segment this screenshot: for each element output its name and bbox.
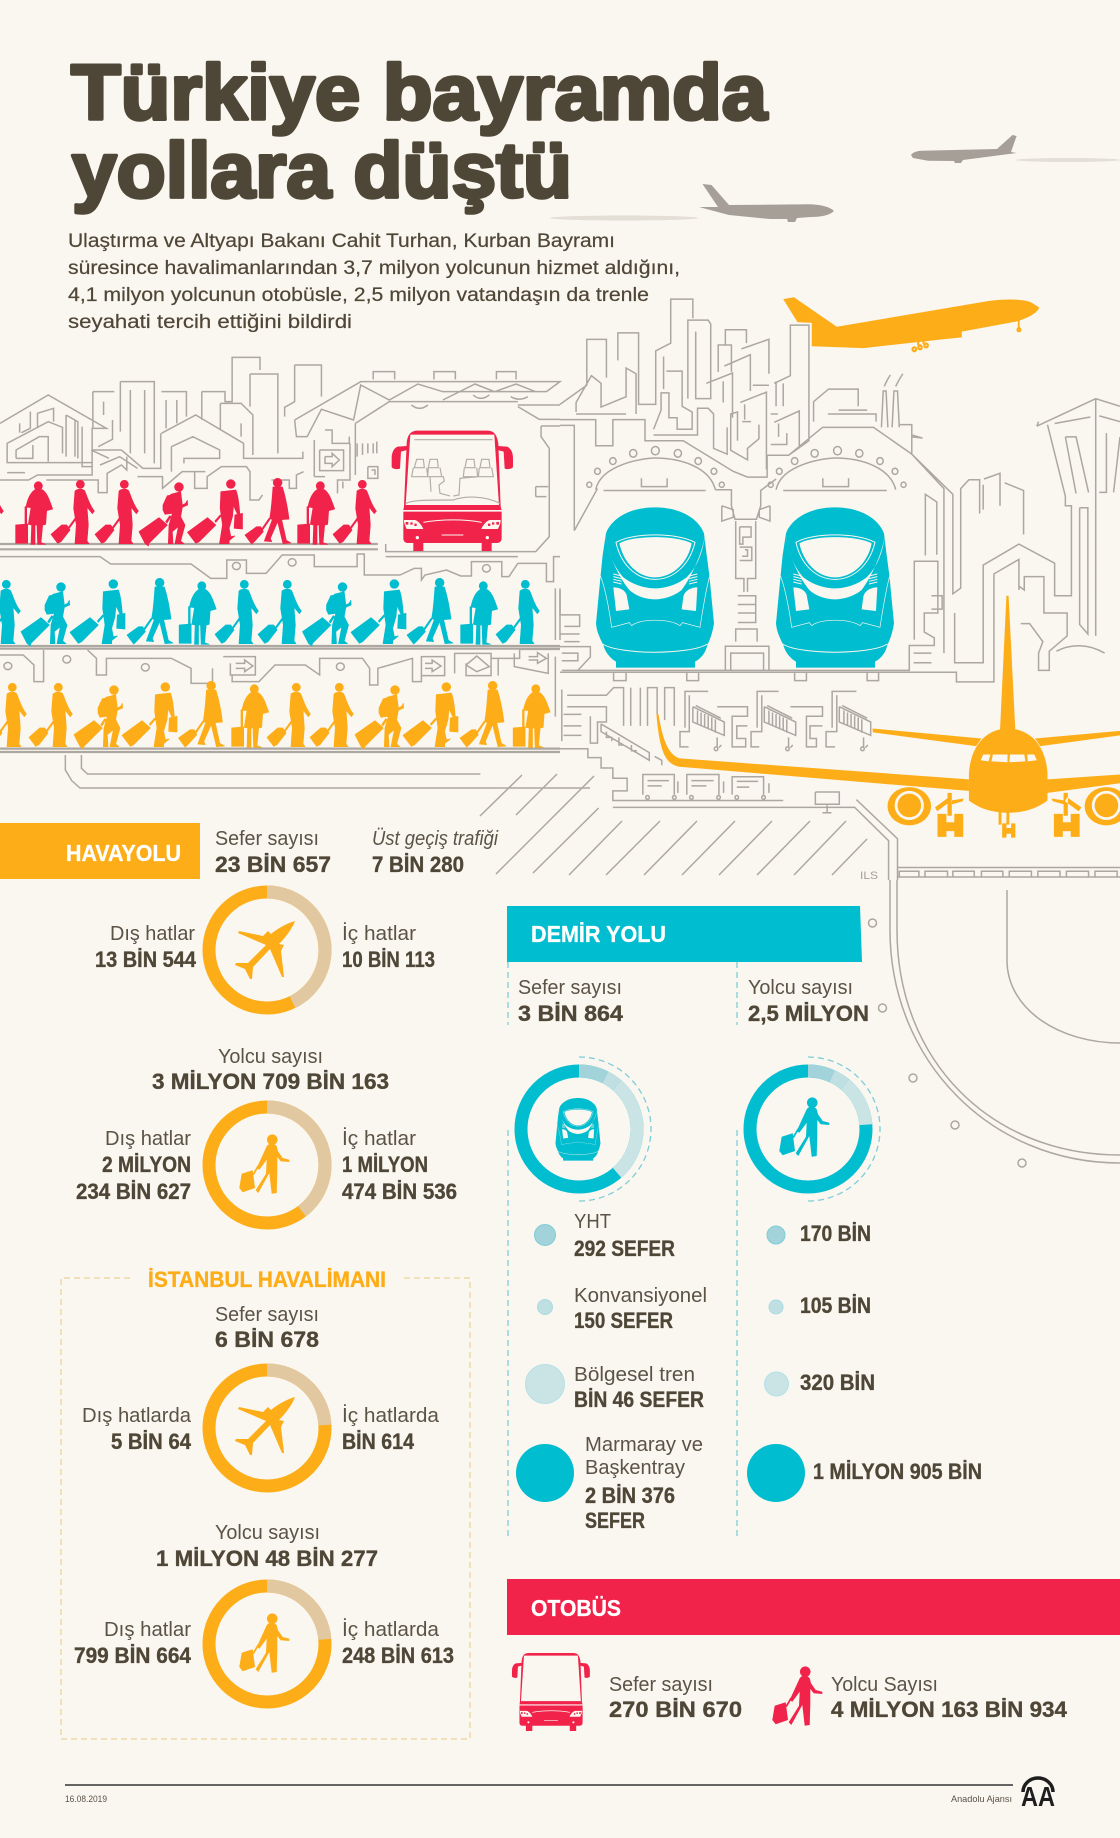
- donut: tren sefer: [521, 1057, 651, 1201]
- legend: bölgesel tren: [526, 1363, 704, 1412]
- panel: otobüs: [507, 1579, 1120, 1731]
- stat: yolcu sayısı: Yolcu sayısı: [215, 1521, 320, 1544]
- legend: konvansiyonel: Konvansiyonel: [574, 1284, 707, 1307]
- label: dış hatlar yolcu: Dış hatlar: [105, 1127, 191, 1150]
- stat: yolcu sayısı: 4 MİLYON 163 BİN 934: [831, 1697, 1067, 1722]
- stat: sefer sayısı: [518, 976, 623, 1026]
- label: dış hatlar sefer: Dış hatlar: [110, 922, 195, 945]
- stat: sefer sayısı: Sefer sayısı: [215, 1303, 319, 1326]
- heading bar: demir yolu: DEMİR YOLU: [531, 921, 666, 947]
- heading bar: havayolu: HAVAYOLU: [66, 840, 181, 866]
- donut: sefer istanbul: [209, 1370, 325, 1486]
- legend: marmaray ve başkentray: 2 BİN 376: [585, 1483, 675, 1508]
- legend: 105 bin: 105 BİN: [800, 1293, 871, 1318]
- icon: bus in scene: [392, 431, 513, 551]
- stat: yolcu sayısı: Yolcu sayısı: [218, 1045, 323, 1068]
- donut: yolcu demir yolu: [750, 1057, 880, 1201]
- label: iç hatlar sefer: İç hatlar: [342, 922, 416, 945]
- stat: üst geçiş trafiği: [372, 827, 499, 877]
- label: iç hatlarda yolcu: İç hatlarda: [342, 1618, 440, 1641]
- label: dış hatlar yolcu: 799 BİN 664: [74, 1643, 191, 1668]
- label: iç hatlar yolcu: [342, 1127, 457, 1204]
- legend: YHT: 292 SEFER: [574, 1236, 675, 1261]
- ILS sign: ILS: [860, 870, 878, 882]
- intro paragraph: seyahati tercih ettiğini bildirdi: [68, 312, 352, 333]
- passenger queue red: [0, 478, 376, 546]
- label: dış hatlar sefer: [95, 922, 196, 972]
- legend: marmaray ve başkentray: Başkentray: [585, 1456, 686, 1479]
- stat: sefer sayısı: [215, 1303, 319, 1352]
- legend: 320 bin: [764, 1370, 875, 1396]
- label: iç hatlar sefer: 10 BİN 113: [342, 947, 435, 972]
- label: iç hatlarda yolcu: [342, 1618, 454, 1668]
- stat: yolcu sayısı: [748, 976, 869, 1026]
- intro paragraph: 4,1 milyon yolcunun otobüsle, 2,5 milyon vatandaşın da trenle: [68, 285, 649, 306]
- label: iç hatlar yolcu: 1 MİLYON: [342, 1152, 428, 1177]
- label: dış hatlar yolcu: [76, 1127, 191, 1204]
- donut: sefer dış iç hatlar: [209, 892, 325, 1008]
- title: Türkiye bayramda: [71, 48, 768, 136]
- footer: 16.08.2019: [65, 1794, 107, 1805]
- legend: konvansiyonel: [538, 1284, 707, 1333]
- intro paragraph: [68, 231, 680, 333]
- stat: sefer sayısı: 270 BİN 670: [609, 1697, 742, 1722]
- icon: high-speed train right: [776, 507, 894, 668]
- title: [71, 48, 768, 214]
- heading bar: havayolu: [0, 823, 200, 879]
- stat: yolcu sayısı: 1 MİLYON 48 BİN 277: [156, 1546, 378, 1571]
- heading bar: otobüs: OTOBÜS: [531, 1595, 621, 1621]
- label: dış hatlar yolcu: Dış hatlar: [104, 1618, 191, 1641]
- label: dış hatlarda sefer: Dış hatlarda: [82, 1404, 192, 1427]
- legend: 170 bin: 170 BİN: [800, 1221, 871, 1246]
- stat: sefer sayısı: Sefer sayısı: [518, 976, 622, 999]
- legend: YHT: [534, 1210, 675, 1261]
- label: dış hatlar yolcu: 234 BİN 627: [76, 1179, 191, 1204]
- panel: havayolu: [0, 823, 499, 1223]
- stat: sefer sayısı: 3 BİN 864: [518, 1001, 623, 1026]
- stat: üst geçiş trafiği: Üst geçiş trafiği: [372, 827, 499, 850]
- label: iç hatlar yolcu: 474 BİN 536: [342, 1179, 457, 1204]
- stat: sefer sayısı: Sefer sayısı: [609, 1673, 713, 1696]
- stat: sefer sayısı: [215, 827, 331, 877]
- passenger queue cyan: [0, 578, 539, 646]
- intro paragraph: süresince havalimanlarından 3,7 milyon yolcunun hizmet aldığını,: [68, 258, 680, 279]
- donut: yolcu istanbul: [209, 1586, 325, 1702]
- panel: istanbul havalimanı: [61, 1267, 470, 1739]
- label: dış hatlar yolcu: 2 MİLYON: [102, 1152, 191, 1177]
- stat: yolcu sayısı: Yolcu Sayısı: [831, 1673, 938, 1696]
- legend: marmaray ve başkentray: Marmaray ve: [585, 1433, 703, 1456]
- donut: yolcu dış iç hatlar: [209, 1107, 325, 1223]
- icon: big plane front view: [656, 596, 1120, 838]
- legend: 105 bin: [769, 1293, 871, 1318]
- label: iç hatlar yolcu: İç hatlar: [342, 1127, 416, 1150]
- stat: sefer sayısı: 23 BİN 657: [215, 852, 331, 877]
- legend: YHT: YHT: [574, 1210, 611, 1233]
- runway lines and hatching: [71, 774, 1120, 1167]
- stat: yolcu sayısı: Yolcu sayısı: [748, 976, 853, 999]
- label: iç hatlar sefer: [342, 922, 435, 972]
- icon: passenger with suitcase: [772, 1666, 822, 1726]
- heading bar: demir yolu: [507, 906, 862, 962]
- gray line-art cityscape left: [0, 357, 560, 780]
- passenger queue orange: [0, 681, 550, 749]
- stat: yolcu sayısı: [831, 1673, 1067, 1722]
- label: iç hatlarda sefer: İç hatlarda: [342, 1404, 440, 1427]
- stat: üst geçiş trafiği: 7 BİN 280: [372, 852, 464, 877]
- panel: demir yolu: [507, 906, 982, 1540]
- label: dış hatlar yolcu: [74, 1618, 191, 1668]
- icon: bus: [512, 1653, 590, 1731]
- gray plane upper with trail: [911, 135, 1120, 163]
- stat: yolcu sayısı: [152, 1045, 389, 1094]
- legend: 1 milyon 905 bin: [747, 1444, 982, 1502]
- legend: 1 milyon 905 bin: 1 MİLYON 905 BİN: [813, 1459, 982, 1484]
- column dividers: [508, 962, 737, 1540]
- stat: sefer sayısı: [609, 1673, 742, 1722]
- gray line-art cityscape right: [560, 299, 1120, 880]
- heading: istanbul havalimanı: İSTANBUL HAVALİMANI: [148, 1267, 386, 1292]
- logo: anadolu ajansı: AA: [1021, 1781, 1055, 1812]
- heading bar: otobüs: [507, 1579, 1120, 1635]
- dashed frame: [61, 1278, 470, 1739]
- stat: sefer sayısı: 6 BİN 678: [215, 1327, 319, 1352]
- legend: bölgesel tren: Bölgesel tren: [574, 1363, 695, 1386]
- legend: marmaray ve başkentray: SEFER: [585, 1508, 645, 1533]
- icon: high-speed train left: [596, 507, 714, 668]
- legend: konvansiyonel: 150 SEFER: [574, 1308, 673, 1333]
- footer: [65, 1778, 1055, 1812]
- label: iç hatlarda sefer: [342, 1404, 440, 1454]
- legend: 320 bin: 320 BİN: [800, 1370, 875, 1395]
- label: dış hatlarda sefer: [82, 1404, 192, 1454]
- intro paragraph: Ulaştırma ve Altyapı Bakanı Cahit Turhan, Kurban Bayramı: [68, 231, 615, 252]
- title: yollara düştü: [72, 126, 572, 214]
- legend: marmaray ve başkentray: [516, 1433, 703, 1533]
- label: iç hatlarda yolcu: 248 BİN 613: [342, 1643, 454, 1668]
- stat: sefer sayısı: Sefer sayısı: [215, 827, 319, 850]
- legend: bölgesel tren: BİN 46 SEFER: [574, 1387, 704, 1412]
- stat: yolcu sayısı: 3 MİLYON 709 BİN 163: [152, 1069, 389, 1094]
- label: iç hatlarda sefer: BİN 614: [342, 1429, 414, 1454]
- footer: Anadolu Ajansı: [951, 1794, 1012, 1805]
- icon: airliner taking off: [783, 297, 1039, 351]
- stat: yolcu sayısı: [156, 1521, 378, 1571]
- label: dış hatlar sefer: 13 BİN 544: [95, 947, 196, 972]
- orange airliner and big front-view plane: [656, 297, 1120, 838]
- gray plane lower with trail: [550, 184, 834, 222]
- label: dış hatlarda sefer: 5 BİN 64: [111, 1429, 191, 1454]
- legend: 170 bin: [767, 1221, 871, 1246]
- stat: yolcu sayısı: 2,5 MİLYON: [748, 1001, 869, 1026]
